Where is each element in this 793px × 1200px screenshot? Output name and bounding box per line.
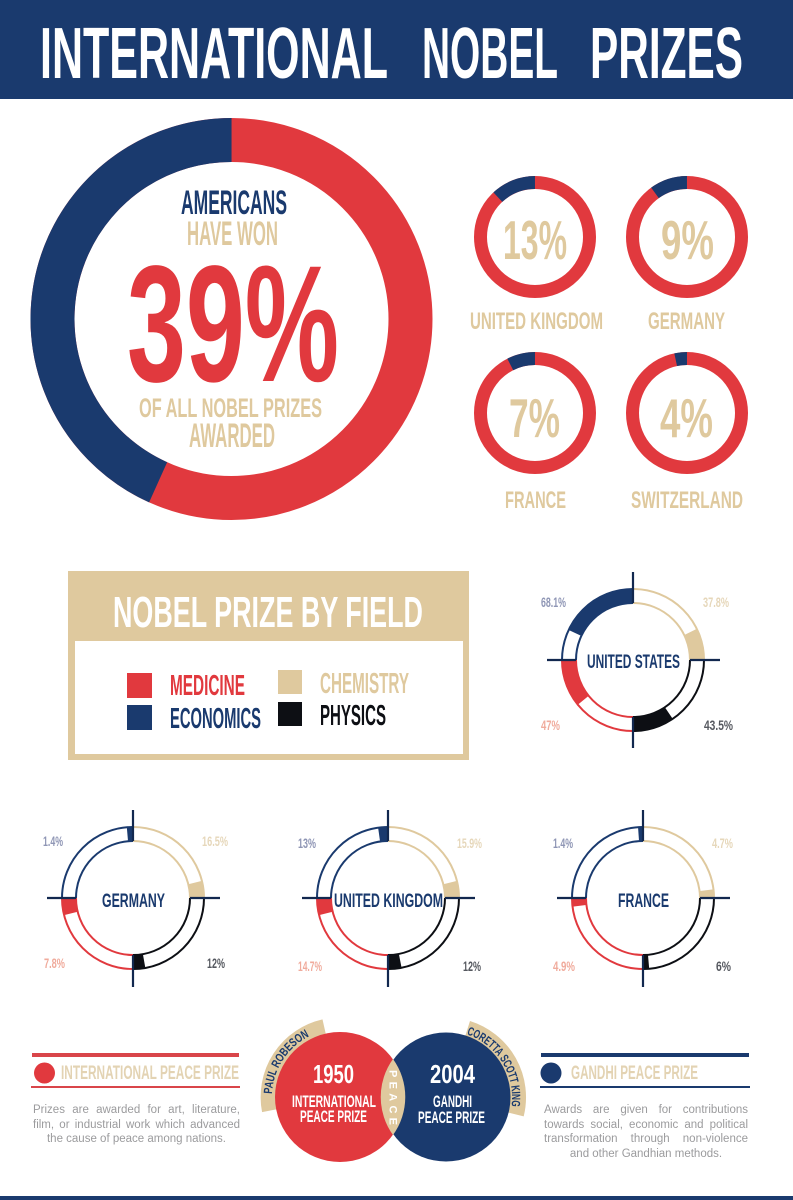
ring chart: United States: 37.8% bbox=[703, 594, 729, 610]
ring chart: United Kingdom: 12% bbox=[463, 958, 481, 974]
ring chart: United Kingdom: 14.7% bbox=[298, 958, 322, 974]
ring chart: United Kingdom: UNITED KINGDOM bbox=[334, 891, 443, 912]
small donut: France 7%: 7% bbox=[509, 387, 560, 449]
ring chart: United States: 43.5% bbox=[704, 717, 733, 733]
peace prize key: International bbox=[31, 1053, 240, 1088]
small donut: France 7%: FRANCE bbox=[505, 487, 566, 514]
main donut: Americans 39% bbox=[0, 82, 468, 556]
circle: Gandhi Peace Prize 2004 bbox=[382, 1032, 510, 1162]
peace prize key: Gandhi bbox=[540, 1053, 750, 1088]
text block: Gandhi Peace Prize description bbox=[544, 1104, 748, 1160]
ring chart: United Kingdom bbox=[298, 810, 482, 987]
small donut: Switzerland 4% bbox=[622, 348, 752, 514]
ring chart: Germany: 7.8% bbox=[44, 955, 65, 971]
circle: Gandhi Peace Prize 2004: GANDHI bbox=[433, 1093, 472, 1111]
ring chart: France bbox=[553, 810, 733, 987]
peace prize key: Gandhi: GANDHI PEACE PRIZE bbox=[571, 1063, 698, 1084]
ring chart: Germany: 1.4% bbox=[43, 833, 63, 849]
ring chart: France: FRANCE bbox=[618, 891, 669, 912]
ring chart: United Kingdom: 13% bbox=[298, 835, 316, 851]
text block: International Peace Prize description bbox=[33, 1104, 240, 1145]
ring chart: United States: 47% bbox=[541, 717, 560, 733]
main donut: Americans 39%: OF ALL NOBEL PRIZES bbox=[139, 393, 322, 423]
legend item: chemistry bbox=[278, 668, 409, 700]
text block: International Peace Prize description: film, or industrial work which advanced bbox=[33, 1119, 240, 1131]
main donut: Americans 39%: AWARDED bbox=[189, 417, 275, 455]
text block: Gandhi Peace Prize description: transformation through non-violence bbox=[544, 1133, 748, 1145]
small donut: Germany 9% bbox=[611, 161, 763, 335]
venn diagram: peace prizes bbox=[260, 1019, 526, 1162]
small donut: Germany 9%: GERMANY bbox=[648, 308, 725, 335]
legend item: economics bbox=[127, 703, 261, 735]
ring chart: United States bbox=[541, 570, 733, 750]
legend item: chemistry: CHEMISTRY bbox=[320, 668, 409, 700]
ring chart: Germany: GERMANY bbox=[102, 891, 165, 912]
circle: International Peace Prize 1950: INTERNATIONAL bbox=[292, 1093, 376, 1111]
circle: International Peace Prize 1950: PEACE PRIZE bbox=[300, 1108, 367, 1126]
small donut: France 7% bbox=[462, 340, 608, 514]
small donut: Germany 9%: 9% bbox=[661, 209, 714, 271]
ring chart: Germany: 16.5% bbox=[202, 833, 228, 849]
circle: International Peace Prize 1950: 1950 bbox=[313, 1059, 354, 1089]
legend item: physics bbox=[278, 700, 386, 732]
legend heading: NOBEL PRIZE BY FIELD bbox=[113, 588, 423, 637]
text block: Gandhi Peace Prize description: and other Gandhian methods. bbox=[570, 1148, 722, 1160]
overlap: peace: PEACE bbox=[386, 1070, 398, 1125]
title banner bbox=[0, 0, 793, 99]
circle: Gandhi Peace Prize 2004: 2004 bbox=[430, 1059, 475, 1089]
ring chart: Germany bbox=[43, 810, 228, 987]
main donut: Americans 39%: HAVE WON bbox=[187, 215, 278, 253]
legend item: economics: ECONOMICS bbox=[170, 703, 261, 735]
text block: Gandhi Peace Prize description: towards social, economic and political bbox=[544, 1119, 748, 1131]
main donut: Americans 39%: 39% bbox=[127, 232, 339, 417]
small donut: United Kingdom 13%: 13% bbox=[503, 209, 567, 271]
main donut: Americans 39%: AMERICANS bbox=[181, 184, 287, 222]
ring chart: France: 6% bbox=[716, 958, 731, 974]
ring chart: Germany: 12% bbox=[207, 955, 225, 971]
title banner: INTERNATIONAL bbox=[40, 14, 388, 94]
ring chart: France: 4.7% bbox=[712, 835, 733, 851]
panel: Nobel prize by field legend bbox=[68, 571, 469, 760]
footer bar bbox=[0, 1196, 793, 1200]
ring chart: France: 1.4% bbox=[553, 835, 573, 851]
legend item: medicine: MEDICINE bbox=[170, 670, 245, 702]
peace prize key: International: INTERNATIONAL PEACE PRIZE bbox=[61, 1063, 239, 1084]
text block: International Peace Prize description: the cause of peace among nations. bbox=[47, 1133, 226, 1145]
small donut: United Kingdom 13% bbox=[458, 160, 612, 335]
title banner: NOBEL bbox=[422, 14, 558, 94]
banner: Paul Robeson bbox=[260, 1019, 326, 1112]
ring chart: United States: 68.1% bbox=[541, 594, 566, 610]
banner: Coretta Scott King: CORETTA SCOTT KING bbox=[468, 1027, 520, 1106]
ring chart: United States: UNITED STATES bbox=[587, 652, 680, 673]
legend item: physics: PHYSICS bbox=[320, 700, 386, 732]
ring chart: United Kingdom: 15.9% bbox=[457, 835, 482, 851]
circle: International Peace Prize 1950 bbox=[275, 1032, 405, 1162]
legend item: medicine bbox=[127, 670, 245, 702]
ring chart: France: 4.9% bbox=[553, 958, 575, 974]
small donut: Switzerland 4%: 4% bbox=[660, 387, 713, 449]
text block: International Peace Prize description: Prizes are awarded for art, literature, bbox=[33, 1104, 240, 1116]
small donut: United Kingdom 13%: UNITED KINGDOM bbox=[470, 308, 603, 335]
text block: Gandhi Peace Prize description: Awards are given for contributions bbox=[544, 1104, 748, 1116]
banner: Paul Robeson: PAUL ROBESON bbox=[264, 1029, 309, 1094]
circle: Gandhi Peace Prize 2004: PEACE PRIZE bbox=[418, 1109, 485, 1127]
overlap: peace bbox=[381, 1059, 405, 1135]
